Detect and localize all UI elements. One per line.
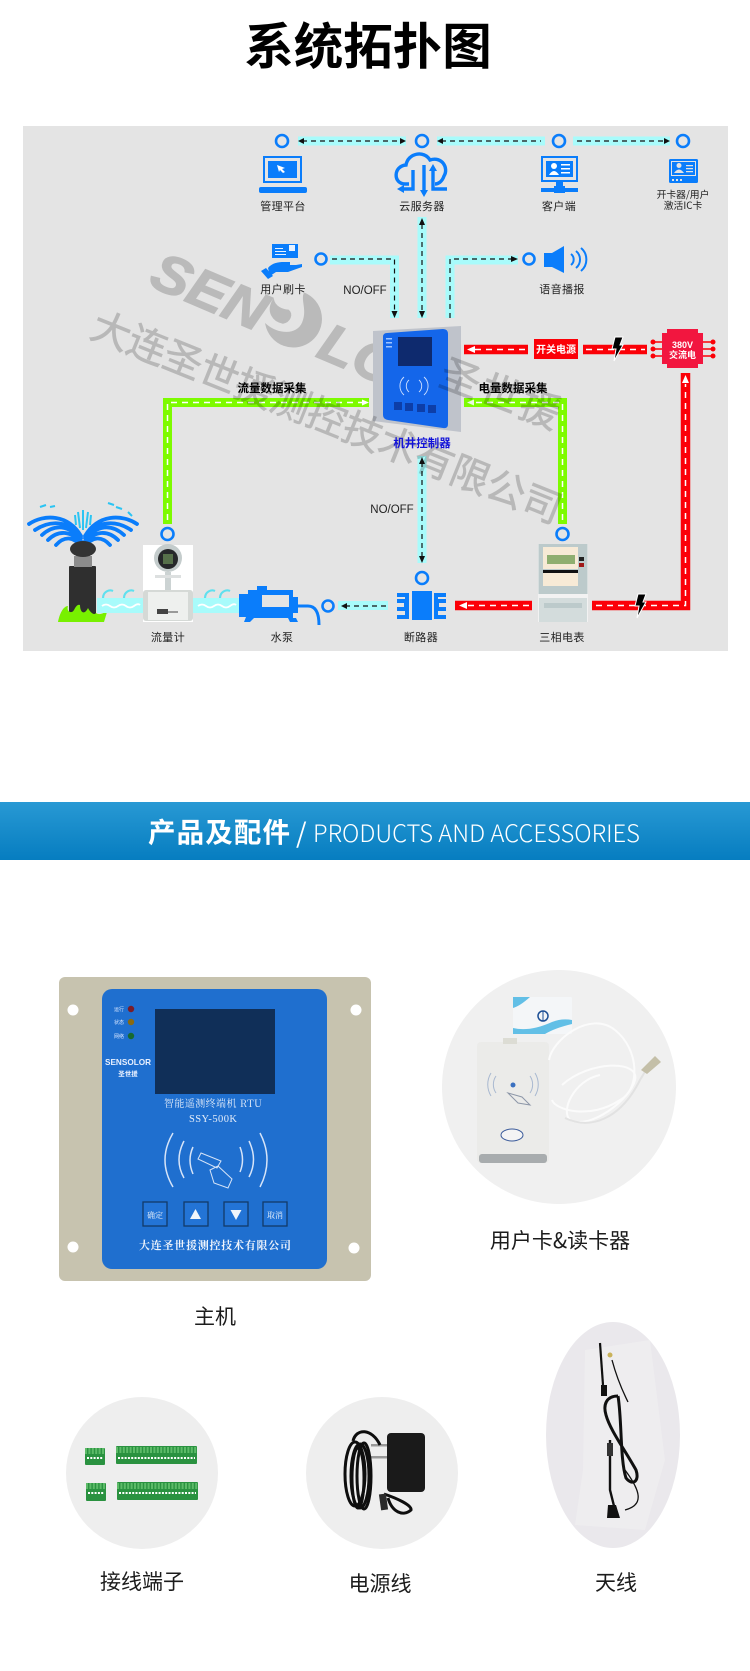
panel: system topology diagram <box>23 126 728 651</box>
label: terminal blocks: 接线端子 <box>100 1566 184 1596</box>
label: water pump: 水泵 <box>271 629 293 645</box>
label: circuit breaker: 断路器 <box>404 629 438 645</box>
indicator lights <box>114 1006 134 1040</box>
icon: water pump <box>239 586 319 625</box>
icon: card reader <box>669 159 698 183</box>
watermark: SENSOLOR: LOR <box>310 312 448 416</box>
indicator lights: 运行 <box>114 1006 124 1013</box>
watermark: brand name: 圣世援 <box>433 342 570 440</box>
section banner: / <box>296 812 307 851</box>
icon: 380V chip: 380V <box>672 340 693 350</box>
title: 系统拓扑图 <box>244 8 492 79</box>
device logo: 圣世援 <box>118 1068 138 1078</box>
label: management platform: 管理平台 <box>260 198 306 214</box>
indicator lights: 状态 <box>114 1019 124 1026</box>
device company name: 大连圣世援测控技术有限公司 <box>139 1237 291 1253</box>
label: user card swipe: 用户刷卡 <box>260 281 306 297</box>
watermark: company name: 大连圣世援测控技术有限公司 <box>84 296 571 535</box>
watermark: SENSOLOR <box>142 235 451 416</box>
label: power cord: 电源线 <box>348 1568 412 1598</box>
icon: circuit breaker <box>397 591 446 620</box>
section banner: 产品及配件 <box>148 810 290 850</box>
product: main unit <box>59 977 371 1281</box>
icon: cloud server <box>396 154 447 197</box>
connector: controller to voice <box>450 256 518 318</box>
water pipe segments <box>97 590 239 613</box>
controller device <box>373 326 461 432</box>
icon: management platform laptop <box>259 157 307 193</box>
switching power box <box>534 339 578 359</box>
icon: user swiping card <box>261 244 302 279</box>
label: three-phase meter: 三相电表 <box>539 629 585 645</box>
switching power box: 开关电源 <box>536 341 576 356</box>
icon: 380V chip: 交流电 <box>669 348 696 361</box>
device name <box>164 1095 262 1125</box>
section banner <box>0 802 750 860</box>
connector: cloud to controller <box>419 217 425 318</box>
label: well controller: 机井控制器 <box>393 435 451 451</box>
connector: breaker to pump <box>338 603 388 609</box>
icon: sprinkler <box>29 503 137 622</box>
device logo: SENSOLOR <box>105 1057 151 1067</box>
device name: SSY-500K <box>189 1114 237 1125</box>
connector: card swipe to controller <box>330 259 398 318</box>
icon: 380V chip <box>650 329 716 368</box>
icon: lightning upper <box>612 337 623 361</box>
label: user card and reader: 用户卡&读卡器 <box>490 1225 630 1255</box>
icon: speaker <box>544 246 586 273</box>
connector: power data <box>464 400 562 524</box>
connector: red power lines <box>455 346 689 609</box>
icon: client monitor <box>541 157 578 193</box>
watermark: SENSOLOR: SEN <box>142 241 277 343</box>
label: NO/OFF upper: NO/OFF <box>343 285 387 297</box>
icon: three-phase meter <box>538 544 588 622</box>
device buttons: 确定 <box>147 1210 163 1221</box>
label: card issuer: 开卡器/用户 <box>657 187 709 201</box>
device name: 智能遥测终端机 RTU <box>164 1095 262 1110</box>
label: flow data collection: 流量数据采集 <box>238 380 307 396</box>
label: power data collection: 电量数据采集 <box>478 380 548 396</box>
device buttons <box>143 1202 287 1226</box>
section banner: PRODUCTS AND ACCESSORIES <box>313 814 640 849</box>
device logo <box>105 1057 151 1078</box>
label: voice broadcast: 语音播报 <box>539 281 585 297</box>
label: card issuer <box>657 187 709 212</box>
product: antenna <box>546 1322 680 1548</box>
label: flow meter: 流量计 <box>151 629 185 645</box>
user card <box>513 997 572 1034</box>
connector: controller to breaker <box>419 456 425 563</box>
label: NO/OFF lower: NO/OFF <box>370 504 414 516</box>
label: main unit: 主机 <box>194 1301 236 1331</box>
label: antenna: 天线 <box>595 1567 637 1597</box>
NFC symbol <box>165 1133 267 1188</box>
icon: flow meter <box>143 544 193 622</box>
device buttons: 取消 <box>267 1210 283 1221</box>
product: user card and reader <box>442 970 676 1204</box>
ring nodes <box>162 135 689 612</box>
card reader <box>477 1038 549 1163</box>
indicator lights: 网络 <box>114 1033 124 1040</box>
connector: top row bus <box>298 138 670 144</box>
USB cable <box>549 1023 646 1123</box>
connector: flow data <box>168 400 369 524</box>
product: power cord <box>306 1397 458 1549</box>
label: client: 客户端 <box>542 198 576 214</box>
label: card issuer: 激活IC卡 <box>664 198 702 212</box>
label: cloud server: 云服务器 <box>399 198 445 214</box>
icon: lightning lower <box>635 594 646 618</box>
product: terminal blocks <box>66 1397 218 1549</box>
